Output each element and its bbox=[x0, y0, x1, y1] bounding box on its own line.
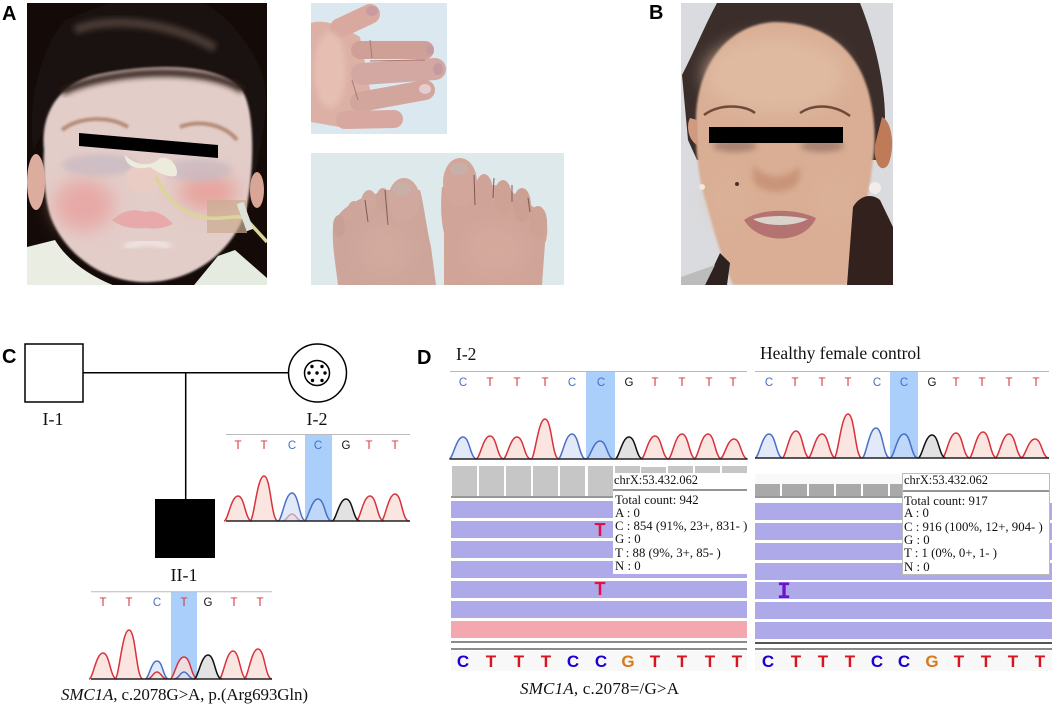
symbol: II-1 affected male bbox=[155, 499, 215, 558]
chromatogram: II-1 pedigree: C bbox=[153, 597, 161, 609]
chromatogram: I-2 panel D bbox=[449, 371, 748, 459]
chromatogram: II-1 pedigree bbox=[89, 592, 272, 679]
caption: D variant: SMC1A, c.2078=/G>A bbox=[520, 679, 680, 698]
alignment view: I-2: T bbox=[514, 652, 525, 671]
alignment view: control: C bbox=[871, 652, 883, 671]
alignment view: I-2: C bbox=[567, 652, 579, 671]
popup: control read counts: N : 0 bbox=[904, 560, 930, 574]
chromatogram: I-2 panel D: T bbox=[651, 377, 659, 389]
caption: C variant: SMC1A, c.2078G>A, p.(Arg693Gln) bbox=[61, 685, 308, 704]
panel label: B: B bbox=[649, 2, 663, 24]
panel label: C: C bbox=[2, 346, 16, 368]
alignment view: I-2: T bbox=[594, 579, 606, 599]
alignment view: I-2: T bbox=[677, 652, 688, 671]
chromatogram: control panel D: T bbox=[818, 377, 826, 389]
chromatogram: control panel D: T bbox=[978, 377, 986, 389]
alignment view: control: T bbox=[845, 652, 856, 671]
label: II-1: II-1 bbox=[171, 565, 197, 585]
chromatogram: II-1 pedigree: T bbox=[180, 597, 188, 609]
popup: I-2 read counts: T : 88 (9%, 3+, 85- ) bbox=[615, 546, 721, 560]
symbol: I-2 carrier female bbox=[288, 344, 346, 402]
chromatogram: II-1 pedigree: T bbox=[125, 597, 133, 609]
chromatogram: I-2 panel D: T bbox=[705, 377, 713, 389]
symbol: I-1 unaffected male bbox=[25, 344, 83, 402]
chromatogram: I-2 pedigree: C bbox=[288, 440, 296, 452]
popup: I-2 read counts: Total count: 942 bbox=[615, 493, 699, 507]
chromatogram: I-2 panel D: T bbox=[513, 377, 521, 389]
popup: control read counts: G : 0 bbox=[904, 533, 930, 547]
heading: healthy female control: Healthy female control bbox=[760, 343, 921, 363]
popup: control read counts: A : 0 bbox=[904, 506, 929, 520]
redaction bar: infant eyes bbox=[79, 133, 218, 158]
pedigree bbox=[25, 344, 346, 585]
alignment view: I-2: T bbox=[650, 652, 661, 671]
chromatogram: control panel D: T bbox=[1032, 377, 1040, 389]
chromatogram: control panel D: C bbox=[900, 377, 908, 389]
alignment view: control: T bbox=[954, 652, 965, 671]
chromatogram: II-1 pedigree: T bbox=[256, 597, 264, 609]
chromatogram: I-2 pedigree: T bbox=[391, 440, 399, 452]
popup: I-2 read counts bbox=[613, 473, 747, 574]
chromatogram: I-2 panel D: T bbox=[729, 377, 737, 389]
popup: I-2 read counts: chrX:53.432.062 bbox=[614, 473, 698, 487]
panel label: D: D bbox=[417, 347, 431, 369]
chromatogram: control panel D: T bbox=[791, 377, 799, 389]
chromatogram: control panel D: T bbox=[844, 377, 852, 389]
popup: control read counts: chrX:53.432.062 bbox=[904, 473, 988, 487]
alignment view: I-2: T bbox=[705, 652, 716, 671]
redaction bar: mother eyes bbox=[709, 127, 843, 143]
photo: feet bbox=[311, 153, 564, 285]
chromatogram: I-2 panel D: T bbox=[678, 377, 686, 389]
popup: I-2 read counts: C : 854 (91%, 23+, 831- ) bbox=[615, 519, 747, 533]
chromatogram: control panel D: C bbox=[873, 377, 881, 389]
popup: control read counts: Total count: 917 bbox=[904, 494, 988, 508]
alignment view: I-2: C bbox=[595, 652, 607, 671]
popup: I-2 read counts: N : 0 bbox=[615, 559, 641, 573]
alignment view: control: T bbox=[1008, 652, 1019, 671]
chromatogram: I-2 panel D: C bbox=[459, 377, 467, 389]
alignment view: control: I bbox=[777, 579, 791, 605]
chromatogram: control panel D: C bbox=[765, 377, 773, 389]
heading: I-2: I-2 bbox=[456, 344, 476, 364]
chromatogram: I-2 pedigree bbox=[224, 434, 410, 521]
photo: mother face bbox=[681, 3, 893, 285]
popup: control read counts bbox=[902, 473, 1050, 574]
chromatogram: I-2 pedigree: C bbox=[314, 440, 322, 452]
chromatogram: I-2 pedigree: T bbox=[260, 440, 268, 452]
label: I-2: I-2 bbox=[306, 409, 328, 429]
chromatogram: control panel D: T bbox=[952, 377, 960, 389]
panel label: A: A bbox=[2, 3, 16, 25]
alignment view: I-2: T bbox=[732, 652, 743, 671]
alignment view: I-2: C bbox=[457, 652, 469, 671]
photo: infant face bbox=[27, 3, 267, 290]
alignment view: control: T bbox=[791, 652, 802, 671]
chromatogram: I-2 panel D: G bbox=[625, 377, 634, 389]
chromatogram: II-1 pedigree: T bbox=[99, 597, 107, 609]
chromatogram: I-2 pedigree: T bbox=[234, 440, 242, 452]
alignment view: control: C bbox=[762, 652, 774, 671]
chromatogram: I-2 panel D: C bbox=[597, 377, 605, 389]
alignment view: control bbox=[755, 473, 1052, 671]
chromatogram: I-2 panel D: C bbox=[568, 377, 576, 389]
chromatogram: control panel D: G bbox=[928, 377, 937, 389]
alignment view: control: T bbox=[818, 652, 829, 671]
chromatogram: II-1 pedigree: G bbox=[204, 597, 213, 609]
photo: hand bbox=[311, 3, 447, 134]
chromatogram: I-2 pedigree: T bbox=[365, 440, 373, 452]
chromatogram: I-2 panel D: T bbox=[486, 377, 494, 389]
chromatogram: control panel D: T bbox=[1005, 377, 1013, 389]
popup: control read counts: T : 1 (0%, 0+, 1- ) bbox=[904, 546, 997, 560]
popup: I-2 read counts: G : 0 bbox=[615, 532, 641, 546]
alignment view: I-2: G bbox=[621, 652, 635, 671]
alignment view: I-2: T bbox=[541, 652, 552, 671]
label: I-1: I-1 bbox=[42, 409, 64, 429]
alignment view: I-2 bbox=[451, 466, 747, 671]
chromatogram: I-2 pedigree: G bbox=[342, 440, 351, 452]
popup: control read counts: C : 916 (100%, 12+, 904- ) bbox=[904, 520, 1043, 534]
alignment view: I-2: T bbox=[594, 520, 606, 540]
popup: I-2 read counts: A : 0 bbox=[615, 506, 640, 520]
alignment view: control: T bbox=[981, 652, 992, 671]
alignment view: control: T bbox=[1035, 652, 1046, 671]
alignment view: control: C bbox=[898, 652, 910, 671]
chromatogram: II-1 pedigree: T bbox=[230, 597, 238, 609]
alignment view: I-2: T bbox=[486, 652, 497, 671]
chromatogram: control panel D bbox=[755, 371, 1049, 458]
alignment view: control: G bbox=[925, 652, 939, 671]
chromatogram: I-2 panel D: T bbox=[541, 377, 549, 389]
